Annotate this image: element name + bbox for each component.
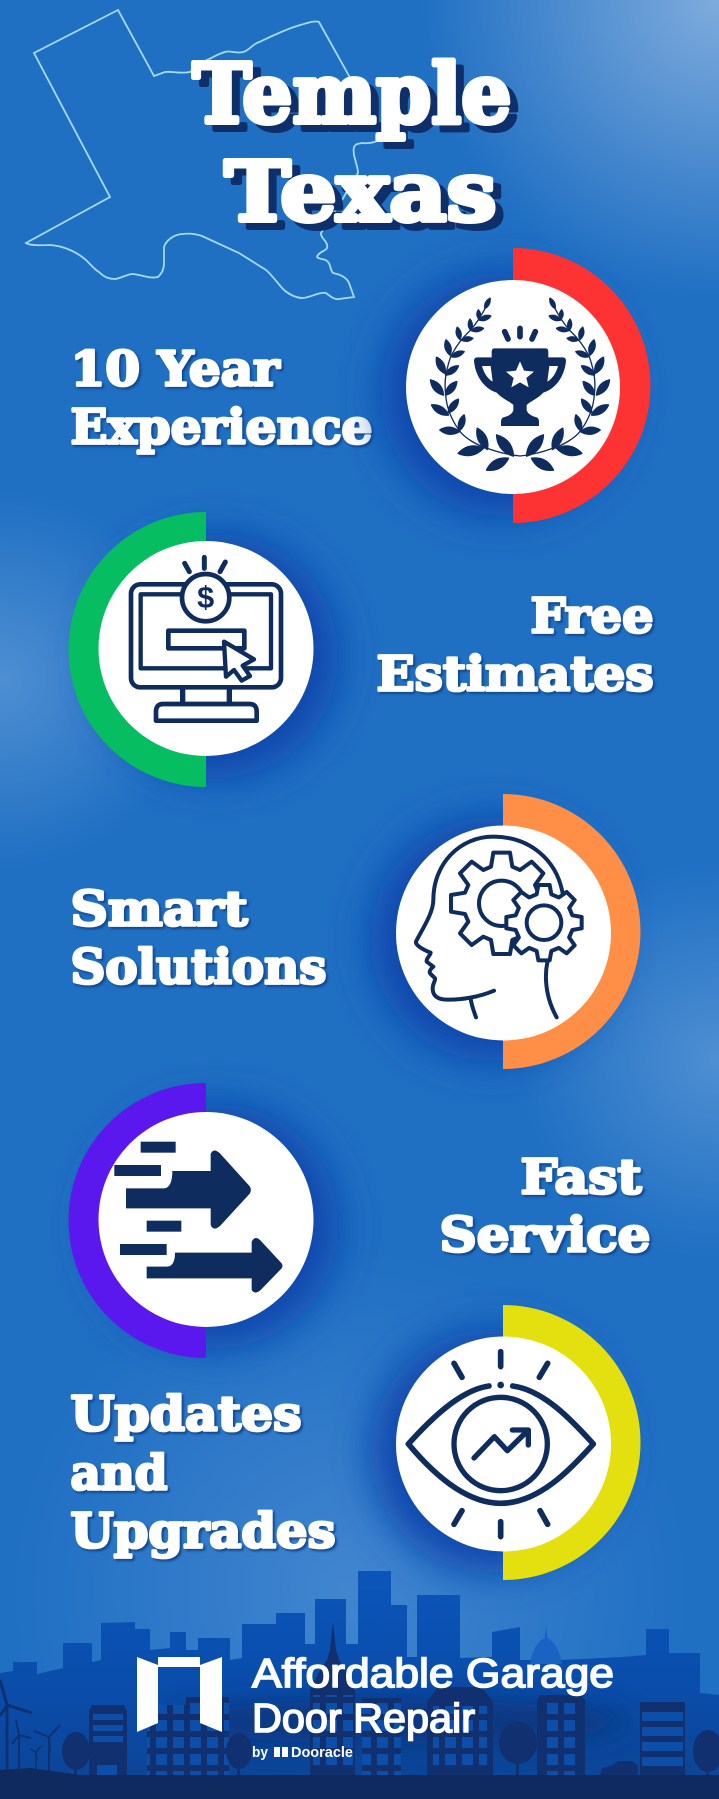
badge: orange ring with head and gears bbox=[371, 794, 641, 1069]
icon: speed arrows bbox=[114, 1142, 282, 1292]
label: Updates and Upgrades bbox=[70, 1386, 336, 1560]
label: Fast Service: Service bbox=[440, 1208, 650, 1264]
wordmark: Affordable Garage bbox=[252, 1650, 614, 1696]
map outline of Texas county bbox=[26, 10, 383, 299]
item 4: Fast Service bbox=[68, 1083, 650, 1358]
label: Free Estimates: Estimates bbox=[376, 646, 654, 702]
item 3: Smart Solutions bbox=[70, 794, 641, 1069]
label: Free Estimates: Free bbox=[530, 588, 654, 644]
badge: red ring with trophy bbox=[381, 248, 650, 523]
label: Updates and Upgrades: Upgrades bbox=[70, 1504, 336, 1560]
badge: yellow ring with eye bbox=[371, 1305, 641, 1580]
city skyline footer bbox=[0, 1571, 719, 1799]
title: Temple Texas: Temple bbox=[192, 46, 512, 142]
title: Temple Texas bbox=[192, 46, 512, 240]
ground bbox=[0, 1768, 719, 1799]
car bbox=[600, 1761, 638, 1775]
item 2: Free Estimates bbox=[68, 512, 654, 787]
label: Updates and Upgrades: Updates bbox=[70, 1386, 302, 1442]
label: 10 Year Experience: Experience bbox=[70, 400, 372, 456]
capitol dome bbox=[530, 1625, 562, 1664]
badge: purple ring with arrows bbox=[68, 1083, 338, 1358]
label: Free Estimates bbox=[376, 588, 654, 702]
item 1: 10 Year Experience bbox=[70, 248, 650, 523]
icon: head with gears bbox=[416, 837, 582, 1017]
label: Updates and Upgrades: and bbox=[70, 1446, 168, 1502]
icon: eye with growth chart bbox=[408, 1352, 593, 1537]
title: Temple Texas: Texas bbox=[224, 144, 496, 240]
wordmark bbox=[252, 1650, 614, 1761]
wordmark: by bbox=[252, 1744, 269, 1761]
icon: computer with dollar coin and cursor bbox=[131, 557, 281, 721]
label: Smart Solutions: Smart bbox=[70, 882, 248, 938]
badge: green ring with computer bbox=[68, 512, 338, 787]
label: Smart Solutions: Solutions bbox=[70, 940, 326, 996]
trees bbox=[62, 1722, 719, 1778]
foreground buildings bbox=[89, 1622, 685, 1775]
wordmark: Door Repair bbox=[252, 1695, 475, 1741]
label: 10 Year Experience bbox=[70, 342, 372, 456]
item 5: Updates and Upgrades bbox=[70, 1305, 641, 1580]
icon: garage door mark bbox=[137, 1657, 222, 1732]
label: Fast Service: Fast bbox=[520, 1150, 642, 1206]
label: Fast Service bbox=[440, 1150, 650, 1264]
logo: Affordable Garage Door Repair by Dooracle bbox=[137, 1650, 614, 1761]
icon: trophy and laurel wreath bbox=[431, 298, 609, 470]
label: 10 Year Experience: 10 Year bbox=[70, 342, 280, 398]
wordmark: Dooracle bbox=[291, 1744, 353, 1761]
label: Smart Solutions bbox=[70, 882, 326, 996]
icon: computer with dollar coin and cursor: $ bbox=[197, 580, 214, 614]
wind turbines bbox=[0, 1680, 60, 1775]
